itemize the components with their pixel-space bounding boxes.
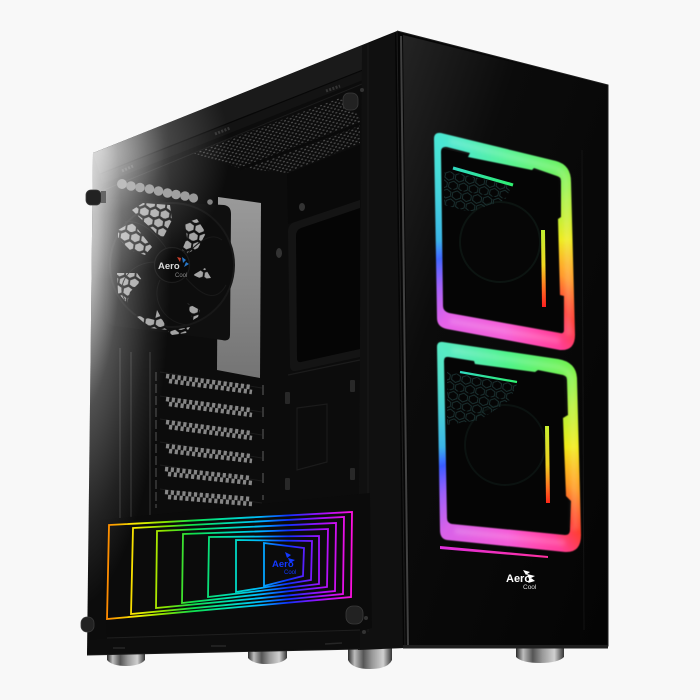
fan blade edges <box>122 222 226 325</box>
top mesh <box>193 98 360 173</box>
case illustration <box>80 30 608 669</box>
white front logo: Aero <box>506 573 531 585</box>
rear bars <box>120 348 263 518</box>
fan logo <box>158 257 189 279</box>
fan hex holes between blades <box>117 203 211 335</box>
front glass panel <box>397 31 608 648</box>
product photo: PC case <box>80 30 608 669</box>
RGB ring lower <box>436 341 582 553</box>
top slots <box>122 86 340 171</box>
front fan 1 internals <box>441 148 564 332</box>
bottom slots <box>113 643 342 648</box>
side panel body <box>87 31 405 655</box>
white front logo: Cool <box>523 584 537 591</box>
magenta light strip <box>440 546 548 558</box>
gray opening beside fan <box>217 197 261 378</box>
blue logo: Cool <box>284 570 296 576</box>
fan <box>106 199 234 340</box>
glass glare <box>88 106 218 575</box>
fan logo: Aero <box>158 261 180 272</box>
tray details <box>288 360 360 470</box>
motherboard tray window <box>288 200 360 371</box>
white front logo <box>506 570 537 591</box>
thumbscrews <box>81 88 368 634</box>
hex vent row above fan <box>117 179 213 205</box>
bottom PSU shroud <box>87 493 372 655</box>
blue logo: Aero <box>272 559 294 570</box>
top band <box>93 43 368 174</box>
PCI slot vent covers <box>165 376 252 504</box>
interior dark <box>287 145 360 224</box>
right pillar <box>358 32 404 650</box>
RGB infinity mirror frames <box>107 512 352 619</box>
feet <box>107 646 564 669</box>
front fan 2 internals <box>444 357 570 533</box>
fan logo: Cool <box>175 273 187 279</box>
PCI slot separators <box>160 372 262 503</box>
RGB ring upper <box>433 132 576 351</box>
blue logo <box>272 552 296 576</box>
